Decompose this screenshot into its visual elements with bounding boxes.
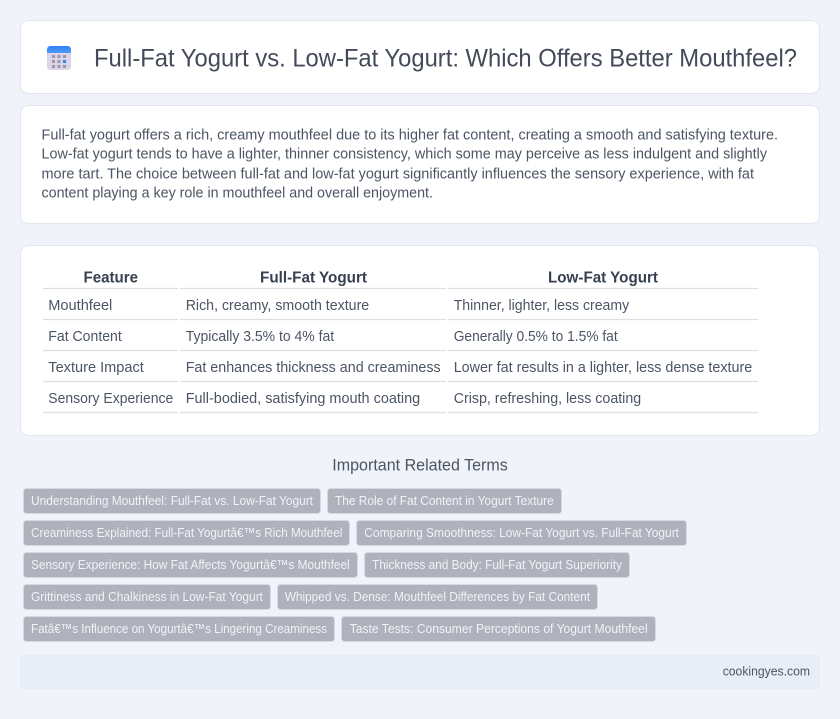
title: Full-Fat Yogurt vs. Low-Fat Yogurt: Which Offers Better Mouthfeel?	[94, 45, 797, 73]
text block: intro paragraph: Full-fat yogurt offers a rich, creamy mouthfeel due to its higher fat content, creating a smooth and satisfying texture.	[42, 126, 778, 143]
tag: The Role of Fat Content in Yogurt Texture	[335, 493, 554, 508]
table row: sensory experience: Full-bodied, satisfying mouth coating	[186, 390, 420, 407]
table row: fat content: Fat Content	[48, 328, 123, 345]
table header: Low-Fat Yogurt	[548, 270, 659, 287]
table row: sensory experience: Crisp, refreshing, less coating	[454, 390, 641, 407]
table row: fat content: Typically 3.5% to 4% fat	[186, 328, 335, 345]
table row: mouthfeel	[48, 297, 630, 314]
tag: Sensory Experience: How Fat Affects Yogurtâ€™s Mouthfeel	[31, 557, 350, 572]
tag	[24, 616, 334, 642]
text block: intro paragraph: content playing a key role in mouthfeel and overall enjoyment.	[42, 185, 433, 202]
table header: Full-Fat Yogurt	[260, 270, 368, 287]
icon: calendar	[47, 46, 71, 70]
tag	[356, 520, 686, 546]
tag	[328, 488, 562, 514]
table row: texture impact: Texture Impact	[48, 359, 145, 376]
table row: mouthfeel: Mouthfeel	[48, 297, 112, 314]
tag: Understanding Mouthfeel: Full-Fat vs. Low-Fat Yogurt	[31, 493, 313, 508]
tag	[24, 552, 358, 578]
tag	[24, 584, 270, 610]
tag: Taste Tests: Consumer Perceptions of Yogurt Mouthfeel	[350, 621, 648, 636]
table row: mouthfeel: Thinner, lighter, less creamy	[454, 297, 630, 314]
text block: intro paragraph	[42, 126, 778, 202]
table row: texture impact: Lower fat results in a lighter, less dense texture	[454, 359, 752, 376]
tag	[24, 488, 320, 514]
footer source text: cookingyes.com	[723, 664, 810, 679]
tag	[278, 584, 598, 610]
tag	[24, 520, 350, 546]
tag: Whipped vs. Dense: Mouthfeel Differences by Fat Content	[285, 589, 590, 604]
panel: intro text	[20, 106, 820, 224]
panel: comparison table	[20, 246, 820, 436]
tag: Grittiness and Chalkiness in Low-Fat Yogurt	[31, 589, 263, 604]
table row: sensory experience	[48, 390, 641, 407]
table row: texture impact: Fat enhances thickness and creaminess	[186, 359, 441, 376]
table row: fat content	[48, 328, 618, 345]
tag: Thickness and Body: Full-Fat Yogurt Superiority	[372, 557, 622, 572]
panel: header	[20, 20, 820, 94]
tag: Creaminess Explained: Full-Fat Yogurtâ€™s Rich Mouthfeel	[31, 525, 342, 540]
tag	[342, 616, 656, 642]
tag: Comparing Smoothness: Low-Fat Yogurt vs. Full-Fat Yogurt	[364, 525, 679, 540]
heading: important related terms: Important Related Terms	[332, 457, 508, 475]
table header	[84, 270, 659, 287]
table row: fat content: Generally 0.5% to 1.5% fat	[454, 328, 618, 345]
tag	[364, 552, 630, 578]
table row: mouthfeel: Rich, creamy, smooth texture	[186, 297, 369, 314]
panel: related term tags	[24, 488, 686, 642]
footer	[20, 655, 820, 689]
text block: intro paragraph: more tart. The choice between full-fat and low-fat yogurt significantly influences the sensory experience, with fat	[42, 165, 755, 182]
table header: Feature	[84, 270, 138, 287]
table row: sensory experience: Sensory Experience	[48, 390, 173, 407]
text block: intro paragraph: Low-fat yogurt tends to have a lighter, thinner consistency, which some may perceive as less indulgent and slightly	[42, 146, 767, 163]
tag: Fatâ€™s Influence on Yogurtâ€™s Lingering Creaminess	[31, 621, 327, 636]
table row: texture impact	[48, 359, 752, 376]
